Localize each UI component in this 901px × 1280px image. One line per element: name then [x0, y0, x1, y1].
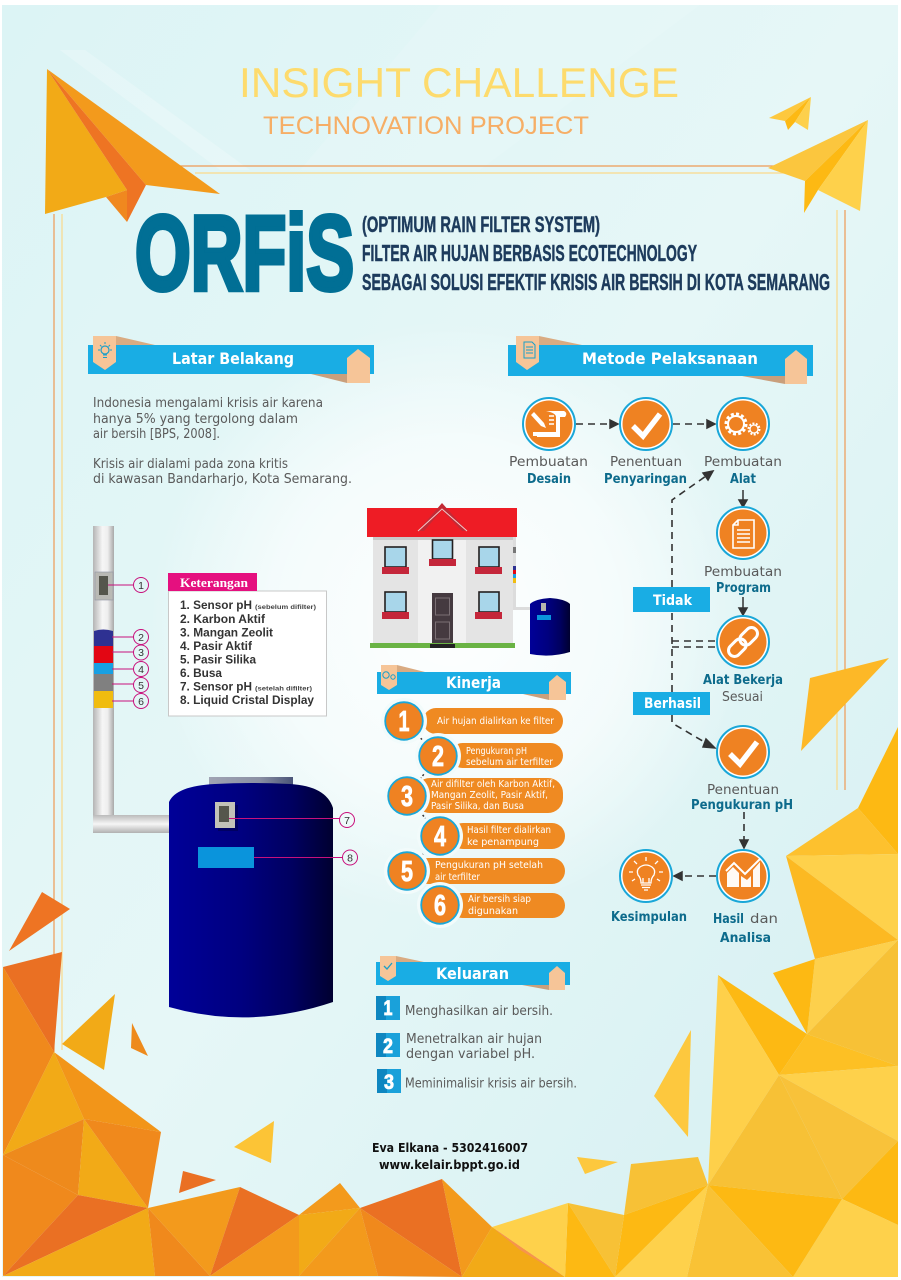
text block: background: [93, 396, 352, 487]
icon: check: [633, 414, 660, 436]
step: hasil dan analisa: Analisa: [720, 931, 771, 946]
legend: keterangan: 7. Sensor pH: [180, 680, 252, 694]
filter layers: [94, 630, 113, 708]
output 1: 1: [384, 997, 393, 1020]
diagram: filter pipe: 4: [138, 664, 144, 676]
panel: keluaran: [376, 956, 577, 1094]
banner: metode pelaksanaan: [508, 336, 813, 384]
step 5: [384, 848, 565, 894]
legend: keterangan: (sebelum difilter): [255, 604, 316, 611]
step: penentuan penyaringan: [604, 398, 687, 487]
step 2: [415, 733, 563, 779]
step: alat bekerja sesuai: Sesuai: [722, 690, 763, 705]
footer credit: [372, 1141, 528, 1172]
paper plane top right: [768, 120, 868, 213]
diagram: water tank: 7: [344, 815, 350, 827]
decoration: yellow polygons bottom right: [492, 658, 898, 1277]
step: penentuan pengukuran pH: Pengukuran pH: [691, 798, 793, 813]
banner: keluaran: Keluaran: [436, 964, 509, 983]
output 2: Menetralkan air hujan: [406, 1032, 542, 1047]
heading: project description: (OPTIMUM RAIN FILTER SYSTEM): [362, 212, 600, 237]
output 3: [377, 1069, 577, 1094]
frame lines: [54, 166, 845, 1052]
diagram: filter pipe: [93, 526, 171, 833]
legend: keterangan: 6. Busa: [180, 666, 222, 680]
label: berhasil: [633, 692, 710, 715]
icon: light bulb: [629, 857, 663, 890]
step 3: Mangan Zeolit, Pasir Aktif,: [431, 790, 548, 801]
label: tidak: Tidak: [653, 593, 693, 609]
text block: background: Indonesia mengalami krisis air karena: [93, 396, 323, 411]
step 4: ke penampung: [467, 837, 539, 848]
output 2: dengan variabel pH.: [406, 1047, 535, 1062]
banner: latar belakang: Latar Belakang: [172, 349, 294, 368]
step 3: 3: [401, 781, 413, 813]
step 3: Air difilter oleh Karbon Aktif,: [431, 779, 555, 790]
panel: latar belakang: [88, 336, 374, 487]
sensor on pipe: [95, 572, 113, 600]
banner: metode pelaksanaan: Metode Pelaksanaan: [582, 349, 758, 368]
label: tidak: [633, 587, 710, 612]
output 1: Menghasilkan air bersih.: [405, 1004, 553, 1019]
step: kesimpulan: Kesimpulan: [611, 910, 687, 925]
step: pembuatan desain: Desain: [527, 472, 571, 487]
step: pembuatan alat: Alat: [730, 472, 756, 487]
tank display: [198, 847, 254, 868]
step: penentuan penyaringan: Penyaringan: [604, 472, 687, 487]
banner: keluaran: [376, 956, 570, 990]
heading: project description: [362, 212, 830, 295]
step 2: sebelum air terfilter: [466, 757, 553, 768]
diagram: filter pipe: 5: [138, 680, 144, 692]
legend: keterangan: [168, 573, 326, 716]
title: INSIGHT CHALLENGE: [239, 59, 679, 106]
diagram: filter pipe: 1: [138, 580, 144, 592]
legend: keterangan: 4. Pasir Aktif: [180, 639, 253, 653]
panel: kinerja: [377, 665, 571, 928]
panel: metode pelaksanaan: [508, 336, 813, 946]
step 2: Pengukuran pH: [466, 746, 527, 757]
text block: background: air bersih [BPS, 2008].: [93, 427, 220, 442]
step 6: Air bersih siap: [468, 894, 531, 905]
footer credit: www.kelair.bppt.go.id: [379, 1158, 520, 1172]
legend: keterangan: 5. Pasir Silika: [180, 652, 256, 666]
diagram: water tank: [169, 777, 358, 1017]
icon: document: [733, 520, 754, 548]
small paper plane top right: [769, 97, 811, 130]
step 1: 1: [398, 706, 410, 738]
step 4: 4: [434, 821, 446, 853]
icon: chart: [726, 859, 760, 887]
step 6: [417, 882, 565, 928]
banner: latar belakang: [88, 336, 374, 383]
legend: keterangan: 8. Liquid Cristal Display: [180, 693, 314, 707]
text block: background: di kawasan Bandarharjo, Kota Semarang.: [93, 472, 352, 487]
step: alat bekerja sesuai: [703, 616, 783, 705]
text block: background: Krisis air dialami pada zona kritis: [93, 457, 288, 472]
callouts 7 and 8: [229, 812, 358, 865]
step 1: Air hujan dialirkan ke filter: [437, 716, 554, 727]
step: penentuan pengukuran pH: [691, 726, 793, 813]
legend: keterangan: 1. Sensor pH: [180, 598, 252, 612]
step 4: Hasil filter dialirkan: [467, 825, 551, 836]
legend: keterangan: 3. Mangan Zeolit: [180, 626, 273, 640]
step: penentuan penyaringan: Penentuan: [610, 455, 682, 470]
step: hasil dan analisa: [713, 850, 778, 946]
step: alat bekerja sesuai: Alat Bekerja: [703, 673, 783, 688]
subtitle: TECHNOVATION PROJECT: [263, 112, 589, 140]
output 2: 2: [383, 1035, 393, 1058]
step 5: Pengukuran pH setelah: [435, 860, 543, 871]
icon: scroll and pen: [531, 411, 566, 437]
step: kesimpulan: [611, 850, 687, 925]
step: penentuan pengukuran pH: Penentuan: [707, 783, 779, 798]
diagram: water tank: 8: [347, 852, 353, 864]
paper plane top left: [45, 69, 220, 222]
banner: kinerja: [377, 665, 571, 700]
step 5: air terfilter: [435, 872, 480, 883]
step: pembuatan program: Program: [716, 581, 771, 596]
decoration: orange polygons bottom left: [3, 892, 565, 1277]
banner: kinerja: Kinerja: [446, 673, 501, 692]
callouts 1 to 6: [108, 578, 148, 708]
icon: gears: [726, 414, 760, 434]
diagram: filter pipe: 6: [138, 696, 144, 708]
diagram: filter pipe: 2: [138, 632, 144, 644]
label: berhasil: Berhasil: [644, 696, 701, 712]
legend: keterangan: (setelah difilter): [255, 686, 312, 692]
output 3: Meminimalisir krisis air bersih.: [405, 1076, 577, 1092]
connectors: [404, 721, 440, 905]
footer credit: Eva Elkana - 5302416007: [372, 1141, 528, 1155]
illustration: house with tank: [367, 503, 570, 656]
step 6: digunakan: [468, 906, 518, 917]
legend: keterangan: Keterangan: [180, 575, 249, 590]
step: pembuatan desain: Pembuatan: [509, 455, 588, 470]
step: hasil dan analisa: Hasil: [713, 912, 744, 927]
step 1: [381, 698, 563, 744]
step: pembuatan program: [704, 507, 782, 596]
step: pembuatan program: Pembuatan: [704, 565, 782, 580]
icon: chain link: [726, 625, 760, 659]
flow arrows: [576, 420, 748, 880]
step 4: [417, 813, 565, 859]
tank sensor: [215, 802, 238, 831]
step 5: 5: [401, 856, 413, 888]
step 3: Pasir Silika, dan Busa: [431, 801, 524, 812]
step: pembuatan alat: [704, 398, 782, 487]
output 3: 3: [384, 1071, 394, 1094]
step 2: 2: [432, 741, 444, 773]
step: hasil dan analisa: dan: [750, 912, 778, 927]
diagram: filter pipe: 3: [138, 647, 144, 659]
step 6: 6: [434, 890, 446, 922]
step: pembuatan alat: Pembuatan: [704, 455, 782, 470]
text block: background: hanya 5% yang tergolong dalam: [93, 412, 298, 427]
step: pembuatan desain: [509, 398, 588, 487]
legend: keterangan: 2. Karbon Aktif: [180, 612, 266, 626]
heading: ORFiS: ORFiS: [135, 194, 354, 312]
output 1: [376, 996, 553, 1020]
step 3: [384, 773, 563, 819]
output 2: [376, 1032, 542, 1062]
icon: check: [730, 742, 757, 764]
